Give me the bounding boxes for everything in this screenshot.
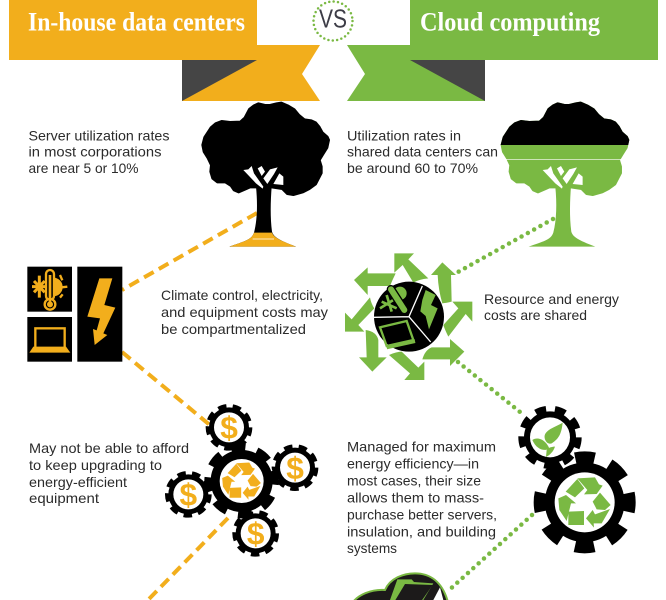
text: upgrading equipment: to keep upgrading to [29, 457, 162, 473]
small gear: right: $ [286, 450, 304, 486]
small gear: right [275, 448, 315, 488]
text: shared utilization: Utilization rates in [347, 128, 461, 144]
header: cloud computing banner: Cloud computing [420, 8, 600, 36]
text: shared utilization: be around 60 to 70% [347, 160, 478, 176]
text: server utilization: in most corporations [28, 144, 162, 160]
VS badge [314, 2, 352, 40]
large gear: recycle [206, 445, 278, 517]
text: managed for efficiency: energy efficiency—in [347, 456, 479, 472]
text: managed for efficiency: most cases, their size [347, 472, 481, 488]
text: managed for efficiency: allows them to mass- [347, 490, 484, 506]
icon: green arrows cycling around shared resources [345, 253, 472, 380]
connector: orange dashed path [122, 213, 257, 600]
icon panel: climate, laptop and power on black tiles [27, 267, 122, 362]
text: resource and energy [484, 291, 619, 323]
icon: black tree on orange ground [203, 103, 329, 247]
text: upgrading equipment [29, 440, 189, 506]
text: climate control [161, 287, 328, 337]
text: shared utilization [347, 128, 498, 176]
text: managed for efficiency: insulation, and building [347, 524, 496, 540]
text: resource and energy: Resource and energy [484, 291, 619, 307]
text: climate control: and equipment costs may [161, 304, 328, 320]
small gear: leaf [523, 410, 577, 465]
icon: black gears with leaf and recycle [523, 410, 629, 547]
small gear: left: $ [180, 477, 198, 513]
VS badge: VS [319, 4, 347, 34]
text: upgrading equipment: energy-efficient [29, 474, 127, 490]
small gear: top: $ [220, 410, 238, 446]
small gear: top [209, 407, 249, 447]
header: cloud computing banner [347, 0, 658, 101]
icon: cloud partly visible at bottom [350, 573, 447, 600]
header: in-house data centers banner: In-house data centers [28, 8, 245, 36]
small gear: left [168, 474, 208, 514]
small gear: bottom [236, 513, 276, 553]
text: managed for efficiency: systems [347, 540, 397, 556]
small gear: bottom: $ [247, 516, 265, 552]
text: climate control: be compartmentalized [161, 321, 306, 337]
icon: black gears with dollars and recycle [168, 407, 315, 553]
text: upgrading equipment: May not be able to afford [29, 440, 189, 456]
text: managed for efficiency: Managed for maximum [347, 438, 496, 454]
icon: green tree with black crown top [502, 103, 628, 247]
text: managed for efficiency [347, 438, 497, 556]
text: climate control: Climate control, electricity, [161, 287, 323, 303]
text: resource and energy: costs are shared [484, 307, 587, 323]
text: server utilization: Server utilization rates [28, 128, 170, 144]
header: in-house data centers banner [9, 0, 320, 101]
text: server utilization: are near 5 or 10% [28, 160, 138, 176]
connector: green dotted path [447, 219, 553, 592]
text: server utilization [28, 128, 170, 176]
text: upgrading equipment: equipment [29, 490, 99, 506]
text: shared utilization: shared data centers can [347, 144, 498, 160]
large gear: recycle [540, 458, 629, 547]
text: managed for efficiency: purchase better servers, [347, 506, 497, 522]
